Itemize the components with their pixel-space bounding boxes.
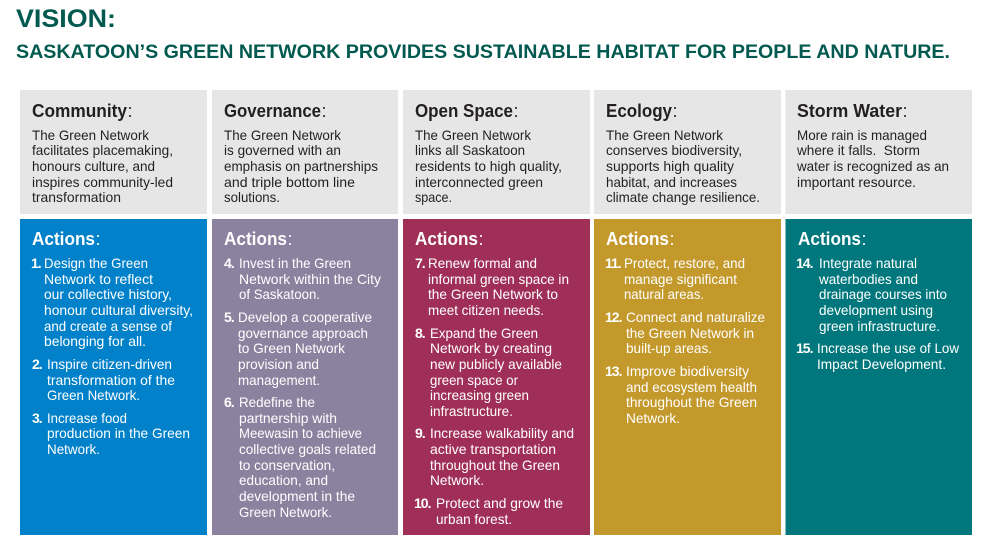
action 7: meet citizen needs. bbox=[428, 302, 544, 318]
text: open space description: space. bbox=[415, 189, 452, 205]
action 6: partnership with bbox=[239, 410, 337, 426]
action 6: to conservation, bbox=[239, 457, 335, 473]
action 5: to Green Network bbox=[238, 340, 346, 356]
heading: actions: : bbox=[670, 229, 675, 249]
action 5: Develop a cooperative bbox=[238, 309, 372, 325]
heading: ecology: Ecology bbox=[606, 101, 672, 121]
panel: open space description bbox=[403, 90, 590, 214]
panel: community description bbox=[20, 90, 207, 214]
action 5: 5. bbox=[224, 309, 234, 325]
action 4: Invest in the Green bbox=[239, 255, 351, 271]
action 1: honour cultural diversity, bbox=[44, 302, 193, 318]
action 10: Protect and grow the bbox=[436, 495, 563, 511]
action 3: production in the Green bbox=[47, 425, 190, 441]
heading: actions: Actions bbox=[32, 229, 95, 249]
action 7 bbox=[415, 255, 569, 318]
heading: actions: : bbox=[288, 229, 293, 249]
action 8: infrastructure. bbox=[430, 403, 513, 419]
action 8: increasing green bbox=[430, 387, 529, 403]
text: community description: The Green Network bbox=[32, 127, 150, 143]
text: community description: transformation bbox=[32, 189, 121, 205]
text: open space description bbox=[415, 127, 562, 205]
heading: actions: : bbox=[96, 229, 101, 249]
action 7: informal green space in bbox=[428, 271, 569, 287]
action 3: 3. bbox=[32, 410, 42, 426]
action 13: Network. bbox=[626, 410, 680, 426]
action 1: belonging for all. bbox=[44, 333, 146, 349]
action 12: built-up areas. bbox=[626, 340, 712, 356]
action 5: management. bbox=[238, 372, 320, 388]
text: governance description: emphasis on partnerships bbox=[224, 158, 378, 174]
heading: open space: Open Space bbox=[415, 101, 513, 121]
action 15: Impact Development. bbox=[817, 356, 946, 372]
action 8: Network by creating bbox=[430, 340, 552, 356]
action 8: Expand the Green bbox=[430, 325, 538, 341]
heading: actions: : bbox=[478, 229, 484, 249]
panel: community actions bbox=[20, 219, 207, 535]
heading: storm water: : bbox=[902, 101, 908, 121]
panel: open space actions bbox=[403, 219, 590, 535]
text: open space description: The Green Network bbox=[415, 127, 532, 143]
action 2: Inspire citizen-driven bbox=[47, 356, 172, 372]
action 1: our collective history, bbox=[44, 286, 172, 302]
action 6: Meewasin to achieve bbox=[239, 425, 362, 441]
action 8: new publicly available bbox=[430, 356, 562, 372]
heading: community: : bbox=[128, 101, 133, 121]
heading: governance: Governance bbox=[224, 101, 321, 121]
panel: storm water actions bbox=[786, 219, 972, 535]
panel: storm water description bbox=[786, 90, 972, 214]
action 4: 4. bbox=[224, 255, 234, 271]
heading: storm water: Storm Water bbox=[797, 101, 902, 121]
action 13: 13. bbox=[605, 363, 622, 379]
text: ecology description bbox=[606, 127, 760, 205]
action 9: throughout the Green bbox=[430, 457, 560, 473]
action 5 bbox=[224, 309, 372, 388]
text: storm water description: important resource. bbox=[797, 174, 916, 190]
text: open space description: links all Saskatoon bbox=[415, 142, 525, 158]
action 6: collective goals related bbox=[239, 441, 376, 457]
action 1: and create a sense of bbox=[44, 318, 172, 334]
action 15: Increase the use of Low bbox=[817, 340, 960, 356]
action 4 bbox=[224, 255, 381, 302]
action 1: 1. bbox=[31, 255, 41, 271]
heading: actions: Actions bbox=[606, 229, 669, 249]
heading: actions: : bbox=[862, 229, 867, 249]
action 14: drainage courses into bbox=[819, 286, 947, 302]
heading: ecology: : bbox=[672, 101, 678, 121]
action 3: Network. bbox=[47, 441, 100, 457]
action 13: throughout the Green bbox=[626, 394, 757, 410]
text: storm water description: where it falls. Storm bbox=[796, 142, 920, 158]
action 9 bbox=[415, 425, 574, 488]
action 14 bbox=[796, 255, 947, 334]
text: governance description bbox=[224, 127, 378, 205]
action 9: Network. bbox=[430, 472, 484, 488]
action 1: Design the Green bbox=[44, 255, 148, 271]
action 8: 8. bbox=[415, 325, 425, 341]
action 2: Green Network. bbox=[47, 387, 140, 403]
action 11: natural areas. bbox=[624, 286, 704, 302]
action 12: 12. bbox=[605, 309, 622, 325]
heading: community: Community bbox=[32, 101, 127, 121]
heading: actions: Actions bbox=[798, 229, 861, 249]
text: ecology description: habitat, and increases bbox=[606, 174, 737, 190]
panel: governance description bbox=[212, 90, 398, 214]
text: governance description: is governed with an bbox=[224, 142, 341, 158]
heading: actions: Actions bbox=[224, 229, 287, 249]
text: open space description: interconnected green bbox=[415, 174, 543, 190]
action 2: 2. bbox=[32, 356, 42, 372]
action 14: Integrate natural bbox=[819, 255, 917, 271]
heading: actions: Actions bbox=[415, 229, 478, 249]
panel: ecology actions bbox=[594, 219, 781, 535]
action 13: and ecosystem health bbox=[626, 379, 757, 395]
text: ecology description: climate change resilience. bbox=[606, 189, 760, 205]
action 12: Connect and naturalize bbox=[626, 309, 765, 325]
action 12 bbox=[605, 309, 765, 356]
action 14: development using bbox=[819, 302, 933, 318]
action 6: Green Network. bbox=[239, 504, 332, 520]
action 4: of Saskatoon. bbox=[239, 286, 320, 302]
panel: ecology description bbox=[594, 90, 781, 214]
action 7: 7. bbox=[415, 255, 425, 271]
action 11: 11. bbox=[605, 255, 621, 271]
action 9: Increase walkability and bbox=[430, 425, 574, 441]
action 9: 9. bbox=[415, 425, 425, 441]
panel: governance actions bbox=[212, 219, 398, 535]
action 7: Renew formal and bbox=[428, 255, 537, 271]
text: governance description: and triple bottom line bbox=[224, 174, 355, 190]
text: community description bbox=[32, 127, 173, 205]
action 7: the Green Network to bbox=[428, 286, 558, 302]
action 3: Increase food bbox=[47, 410, 127, 426]
action 6: education, and bbox=[239, 472, 328, 488]
action 1 bbox=[31, 255, 193, 349]
text: ecology description: The Green Network bbox=[606, 127, 724, 143]
action 10: urban forest. bbox=[436, 511, 512, 527]
action 11: Protect, restore, and bbox=[624, 255, 745, 271]
action 10: 10. bbox=[414, 495, 431, 511]
text: storm water description: More rain is managed bbox=[797, 127, 927, 143]
heading: open space: : bbox=[514, 101, 519, 121]
text: community description: facilitates placemaking, bbox=[32, 142, 173, 158]
action 2: transformation of the bbox=[47, 372, 175, 388]
text: storm water description bbox=[796, 127, 949, 190]
text: governance description: The Green Network bbox=[224, 127, 342, 143]
action 8: green space or bbox=[430, 372, 518, 388]
action 13: Improve biodiversity bbox=[626, 363, 749, 379]
action 8 bbox=[415, 325, 562, 419]
action 14: waterbodies and bbox=[818, 271, 918, 287]
action 11 bbox=[605, 255, 745, 302]
text: governance description: solutions. bbox=[224, 189, 280, 205]
text: storm water description: water is recognized as an bbox=[796, 158, 949, 174]
title: vision: VISION: bbox=[16, 5, 116, 33]
action 5: governance approach bbox=[238, 325, 368, 341]
action 9: active transportation bbox=[430, 441, 556, 457]
action 6 bbox=[224, 394, 376, 520]
action 12: the Green Network in bbox=[626, 325, 754, 341]
action 15 bbox=[796, 340, 960, 372]
text: community description: honours culture, and bbox=[32, 158, 155, 174]
action 3 bbox=[32, 410, 190, 457]
text: ecology description: supports high quality bbox=[606, 158, 734, 174]
text: community description: inspires community-led bbox=[32, 174, 173, 190]
action 6: 6. bbox=[224, 394, 234, 410]
action 5: provision and bbox=[238, 356, 319, 372]
text: ecology description: conserves biodiversity, bbox=[606, 142, 742, 158]
action 6: development in the bbox=[239, 488, 355, 504]
action 1: Network to reflect bbox=[44, 271, 153, 287]
subtitle: vision statement: SASKATOON’S GREEN NETWORK PROVIDES SUSTAINABLE HABITAT FOR PEOPLE AND NATURE. bbox=[16, 41, 950, 63]
action 6: Redefine the bbox=[239, 394, 315, 410]
action 15: 15. bbox=[796, 340, 813, 356]
heading: governance: : bbox=[322, 101, 327, 121]
action 4: Network within the City bbox=[239, 271, 381, 287]
text: open space description: residents to high quality, bbox=[415, 158, 562, 174]
action 14: green infrastructure. bbox=[819, 318, 940, 334]
action 11: manage significant bbox=[624, 271, 737, 287]
action 2 bbox=[32, 356, 175, 403]
action 13 bbox=[605, 363, 757, 426]
action 10 bbox=[414, 495, 563, 527]
action 14: 14. bbox=[796, 255, 813, 271]
